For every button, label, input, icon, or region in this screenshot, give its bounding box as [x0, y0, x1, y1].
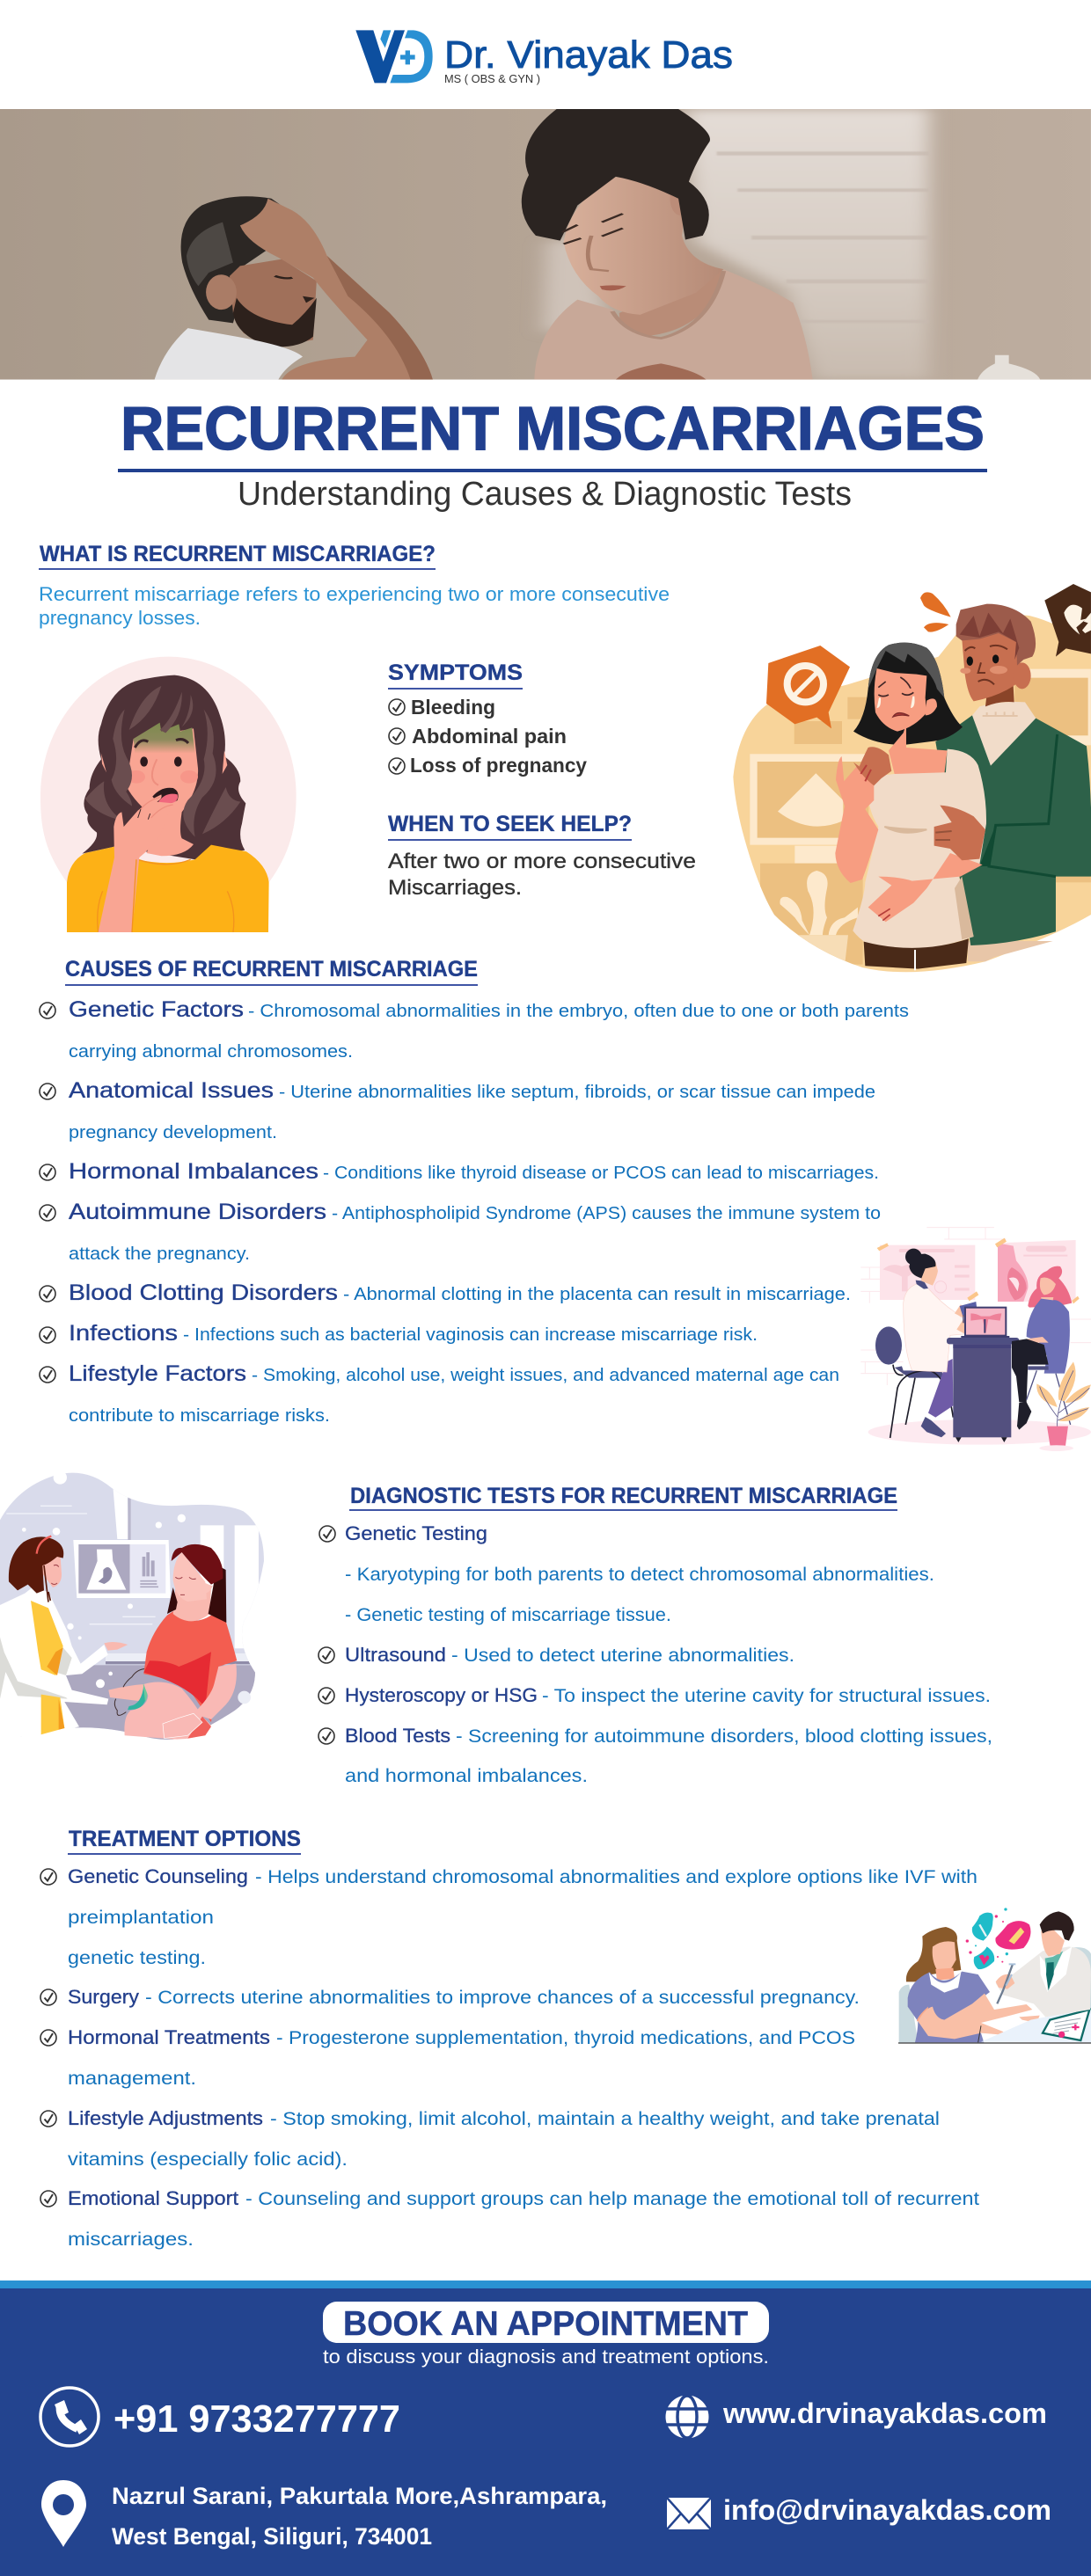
treatment: genetic counseling: Genetic Counseling	[68, 1865, 248, 1887]
icon: envelope	[667, 2498, 711, 2529]
cause: autoimmune disorders: - Antiphospholipid Syndrome (APS) causes the immune system to	[332, 1203, 881, 1223]
call to action caption: to discuss your diagnosis and treatment options.	[323, 2346, 769, 2368]
section: treatment options	[40, 1827, 979, 2250]
panel: symptoms: Abdominal pain	[412, 725, 567, 748]
address	[112, 2483, 607, 2550]
cause: blood clotting disorders: Blood Clotting Disorders	[69, 1281, 338, 1305]
treatment: hormonal treatments: Hormonal Treatments	[68, 2026, 270, 2048]
hero photo: distressed couple	[0, 109, 1091, 380]
cause: lifestyle factors: contribute to miscarriage risks.	[69, 1405, 330, 1426]
treatment: emotional support: - Counseling and support groups can help manage the emotional toll of recurrent	[245, 2188, 979, 2209]
title: RECURRENT MISCARRIAGES	[121, 394, 985, 463]
website: www.drvinayakdas.com	[722, 2397, 1047, 2429]
illustration: doctor consultation	[860, 1228, 1091, 1451]
section: what is recurrent miscarriage	[39, 542, 670, 629]
treatment: emotional support	[40, 2187, 979, 2250]
treatment: emotional support: miscarriages.	[68, 2229, 194, 2250]
cause: lifestyle factors: Lifestyle Factors	[69, 1361, 246, 1386]
treatment: surgery: Surgery	[68, 1986, 140, 2008]
treatment: hormonal treatments	[40, 2026, 855, 2089]
cause: autoimmune disorders: Autoimmune Disorders	[69, 1200, 326, 1224]
cause: autoimmune disorders	[40, 1200, 881, 1264]
test: ultrasound: Ultrasound	[345, 1644, 446, 1666]
treatment: emotional support: Emotional Support	[68, 2187, 239, 2209]
address: West Bengal, Siliguri, 734001	[112, 2523, 432, 2550]
test: genetic testing: - Karyotyping for both parents to detect chromosomal abnormalities.	[345, 1564, 934, 1585]
cause: hormonal imbalances	[40, 1159, 879, 1184]
treatment: hormonal treatments: - Progesterone supplementation, thyroid medications, and PCOS	[276, 2027, 855, 2048]
treatment: hormonal treatments: management.	[68, 2068, 196, 2089]
test: ultrasound	[319, 1644, 794, 1666]
test: genetic testing: Genetic Testing	[345, 1522, 487, 1544]
treatment: genetic counseling: preimplantation	[68, 1907, 214, 1928]
test: hysteroscopy or hsg: Hysteroscopy or HSG	[345, 1684, 538, 1706]
cause: hormonal imbalances: - Conditions like thyroid disease or PCOS can lead to miscarriages.	[323, 1163, 879, 1183]
cause: autoimmune disorders: attack the pregnancy.	[69, 1244, 250, 1264]
panel: when to seek help	[388, 812, 696, 900]
icon: phone	[40, 2388, 99, 2446]
cause: blood clotting disorders: - Abnormal clotting in the placenta can result in miscarriage.	[343, 1284, 851, 1304]
logo: Dr. Vinayak Das	[444, 33, 733, 77]
panel: symptoms	[388, 660, 587, 777]
heading: causes: CAUSES OF RECURRENT MISCARRIAGE	[65, 957, 478, 982]
call to action button: BOOK AN APPOINTMENT	[343, 2305, 748, 2343]
phone number: +91 9733277777	[113, 2397, 400, 2441]
test: blood tests: and hormonal imbalances.	[345, 1765, 588, 1786]
logo: MS ( OBS & GYN )	[444, 72, 540, 85]
treatment: genetic counseling	[40, 1865, 978, 1968]
illustration: grieving couple	[733, 584, 1091, 972]
section: what is recurrent miscarriage: Recurrent miscarriage refers to experiencing two or more consecutive	[39, 583, 670, 605]
heading: diagnostic tests: DIAGNOSTIC TESTS FOR RECURRENT MISCARRIAGE	[350, 1484, 897, 1508]
section: what is recurrent miscarriage: WHAT IS RECURRENT MISCARRIAGE?	[40, 542, 436, 566]
test: ultrasound: - Used to detect uterine abnormalities.	[451, 1645, 794, 1666]
treatment: genetic counseling: genetic testing.	[68, 1947, 206, 1968]
section: what is recurrent miscarriage: pregnancy losses.	[39, 607, 201, 629]
illustration: doctor giving injection	[898, 1908, 1091, 2044]
treatment: lifestyle adjustments: Lifestyle Adjustments	[68, 2107, 263, 2129]
test: hysteroscopy or hsg: - To inspect the uterine cavity for structural issues.	[542, 1685, 991, 1706]
section: causes of recurrent miscarriage	[40, 957, 909, 1426]
treatment: genetic counseling: - Helps understand chromosomal abnormalities and explore options like IVF with	[255, 1866, 978, 1887]
address: Nazrul Sarani, Pakurtala More,Ashrampara,	[112, 2483, 607, 2509]
cause: lifestyle factors	[40, 1361, 839, 1426]
cause: hormonal imbalances: Hormonal Imbalances	[69, 1159, 319, 1184]
cause: genetic factors: - Chromosomal abnormalities in the embryo, often due to one or both parents	[248, 1001, 909, 1021]
test: blood tests	[319, 1725, 992, 1786]
test: blood tests: - Screening for autoimmune disorders, blood clotting issues,	[456, 1726, 992, 1747]
treatment: lifestyle adjustments: vitamins (especially folic acid).	[68, 2149, 348, 2170]
subtitle: Understanding Causes & Diagnostic Tests	[238, 476, 852, 513]
test: hysteroscopy or hsg	[319, 1684, 991, 1706]
cause: lifestyle factors: - Smoking, alcohol use, weight issues, and advanced maternal age can	[252, 1365, 839, 1385]
cause: genetic factors: Genetic Factors	[69, 997, 244, 1022]
test: genetic testing	[319, 1522, 934, 1625]
logo	[355, 30, 733, 85]
footer panel: book an appointment and contacts	[0, 2280, 1091, 2576]
treatment: surgery: - Corrects uterine abnormalities to improve chances of a successful pregnancy.	[145, 1987, 860, 2008]
cause: infections: - Infections such as bacterial vaginosis can increase miscarriage risk.	[183, 1324, 758, 1345]
heading: treatment options: TREATMENT OPTIONS	[69, 1827, 301, 1851]
test: genetic testing: - Genetic testing of miscarriage tissue.	[345, 1604, 671, 1625]
panel: when to seek help: After two or more consecutive	[388, 850, 696, 873]
panel: symptoms: Loss of pregnancy	[410, 754, 587, 777]
icon: globe	[664, 2396, 710, 2438]
cause: genetic factors	[40, 997, 909, 1062]
panel: when to seek help: Miscarriages.	[388, 876, 522, 900]
illustration: woman feeling nauseous	[40, 657, 297, 932]
treatment: lifestyle adjustments: - Stop smoking, limit alcohol, maintain a healthy weight, and take prenatal	[270, 2108, 940, 2129]
cause: blood clotting disorders	[40, 1281, 851, 1305]
cause: anatomical issues: pregnancy development.	[69, 1122, 277, 1142]
cause: anatomical issues: Anatomical Issues	[69, 1078, 274, 1103]
cause: infections: Infections	[69, 1321, 178, 1346]
test: blood tests: Blood Tests	[345, 1725, 450, 1747]
panel: when to seek help: WHEN TO SEEK HELP?	[388, 812, 632, 836]
cause: anatomical issues: - Uterine abnormalities like septum, fibroids, or scar tissue can impede	[279, 1082, 875, 1102]
cause: infections	[40, 1321, 758, 1346]
treatment: lifestyle adjustments	[40, 2107, 940, 2170]
cause: anatomical issues	[40, 1078, 875, 1142]
email: info@drvinayakdas.com	[723, 2494, 1051, 2526]
panel: symptoms: SYMPTOMS	[388, 660, 523, 685]
illustration: ultrasound examination	[0, 1470, 273, 1744]
cause: genetic factors: carrying abnormal chromosomes.	[69, 1041, 353, 1062]
icon: map pin	[41, 2480, 86, 2547]
panel: symptoms: Bleeding	[411, 696, 495, 719]
section: diagnostic tests	[319, 1484, 992, 1786]
